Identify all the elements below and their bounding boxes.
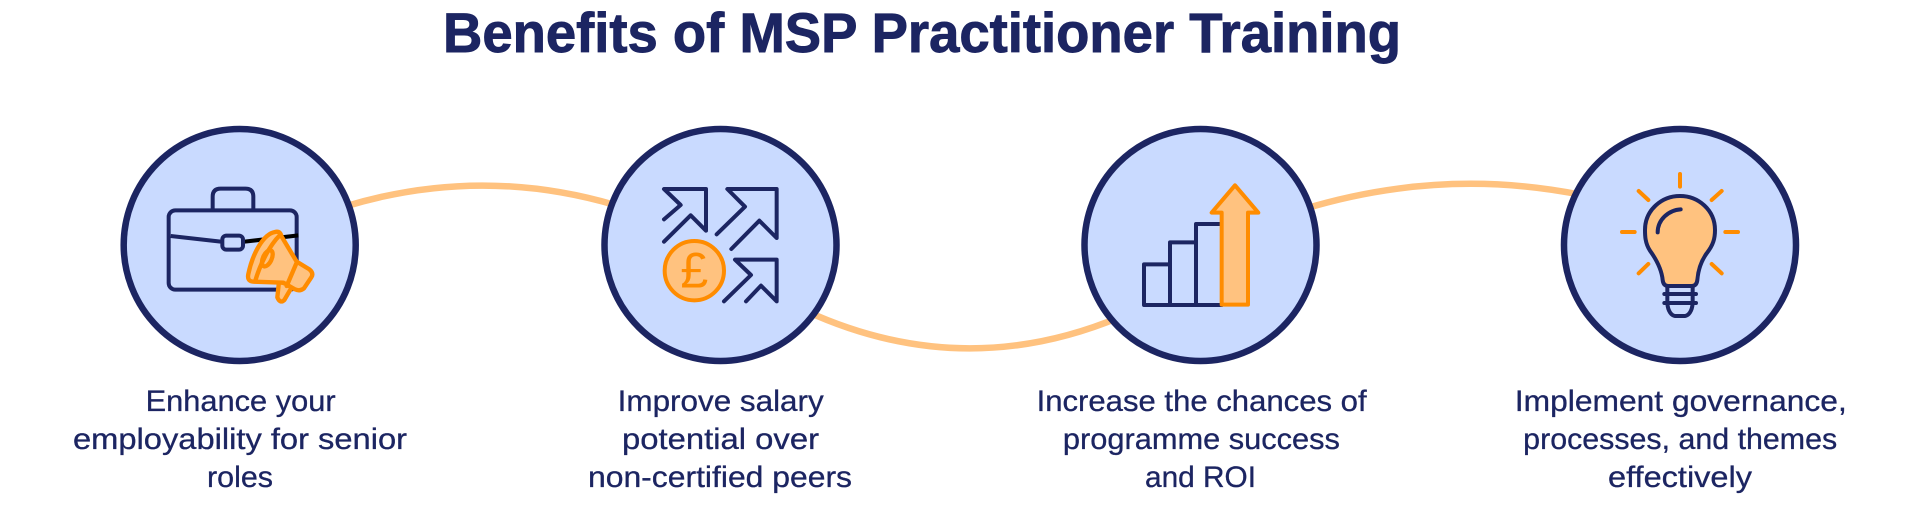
caption 1: Enhance your	[146, 385, 336, 418]
growth arrows	[664, 189, 777, 301]
icon: bar chart and up arrow	[1144, 185, 1258, 305]
pound coin: £	[680, 242, 708, 298]
up arrow	[1212, 185, 1258, 305]
connector curves	[345, 184, 1582, 348]
circle 4	[1564, 129, 1796, 361]
caption 3	[1037, 385, 1367, 494]
step 4: governance	[1515, 129, 1847, 494]
bulb	[1645, 196, 1715, 316]
circle 2	[604, 129, 836, 361]
caption 1: employability for senior	[73, 423, 407, 456]
megaphone	[248, 232, 312, 301]
icon: light bulb	[1622, 174, 1738, 316]
step 1: employability	[73, 129, 407, 494]
rays	[1622, 174, 1738, 273]
icon: arrows and pound coin	[664, 189, 777, 301]
caption 1	[73, 385, 407, 494]
caption 3: Increase the chances of	[1037, 385, 1367, 418]
icon: briefcase and megaphone	[169, 189, 312, 301]
circle 3	[1084, 129, 1316, 361]
circle 1	[124, 129, 356, 361]
briefcase	[169, 189, 298, 290]
caption 2	[588, 385, 852, 494]
caption 1: roles	[207, 461, 273, 494]
bars	[1144, 224, 1222, 305]
caption 2: non-certified peers	[588, 461, 852, 494]
caption 4: processes, and themes	[1523, 423, 1837, 456]
caption 3: and ROI	[1145, 461, 1256, 494]
caption 4	[1515, 385, 1847, 494]
caption 2: Improve salary	[618, 385, 824, 418]
caption 3: programme success	[1063, 423, 1340, 456]
caption 4: Implement governance,	[1515, 385, 1847, 418]
step 2: salary	[588, 129, 852, 494]
caption 4: effectively	[1608, 461, 1752, 494]
caption 2: potential over	[622, 423, 819, 456]
step 3: programme success	[1037, 129, 1367, 494]
title: Benefits of MSP Practitioner Training	[443, 1, 1401, 64]
